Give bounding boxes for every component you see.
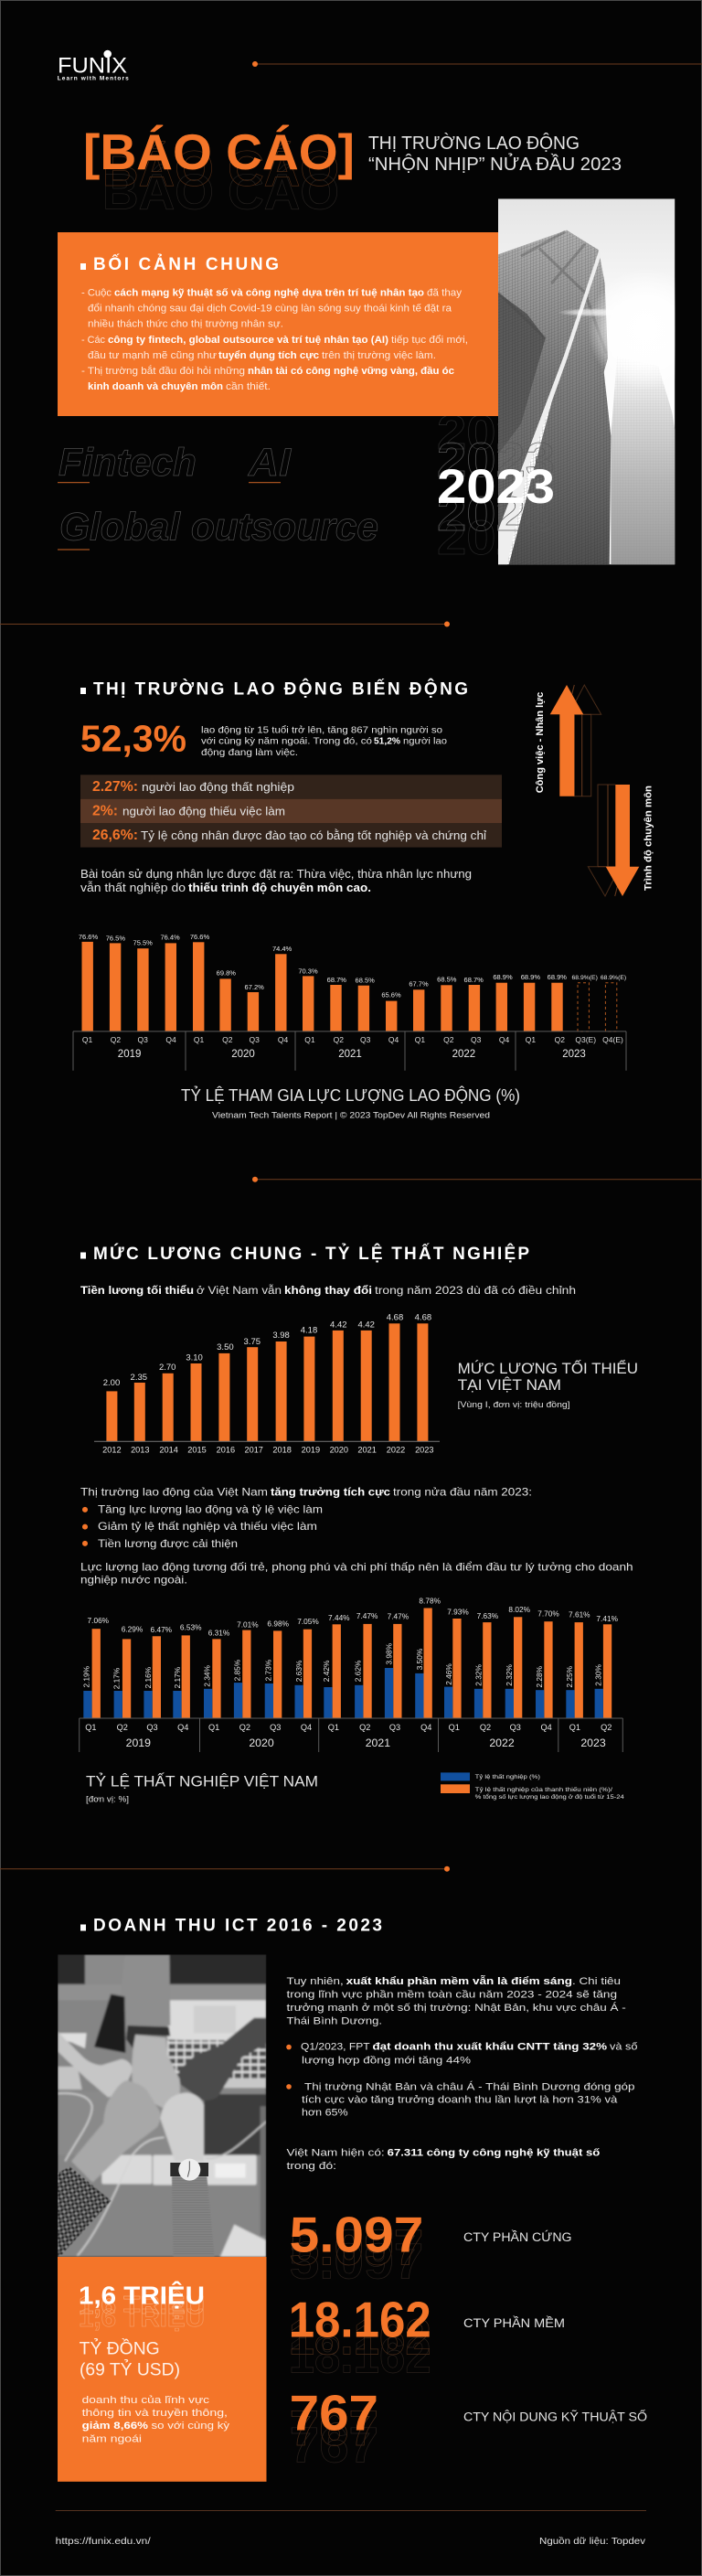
quarter labels: Q1 [328,1723,339,1732]
text block: stat description: động đang làm việc. [201,747,298,758]
value labels: 4.18 [301,1326,317,1336]
stat: 1,6 triệu with ghost outlines: 1,6 TRIỆU [79,2291,205,2319]
text block: minimum wage note: ở Việt Nam vẫn [197,1285,282,1297]
value labels: 76.6% [190,933,209,941]
stat unit: TỶ ĐỒNG [80,2339,160,2359]
panel: labour stats rows: người lao động thất nghiệp [142,780,294,794]
photo: fist bump over desk [58,1954,266,2257]
value labels: 3.10 [186,1353,203,1363]
year labels: 2017 [244,1445,263,1454]
text block: minimum wage note: không thay đổi [284,1286,372,1297]
value labels: 74.4% [272,945,292,953]
blue value labels: 2.17% [173,1666,182,1688]
blue value labels: 2.17% [112,1667,121,1689]
divider with dot: section 3 bottom [0,1866,450,1872]
panel: labour stats rows: 2%: [92,803,118,818]
value labels: 3.50 [217,1342,234,1352]
year labels: 2023 [580,1737,606,1749]
blue value labels: 3.98% [385,1642,394,1664]
orange value labels [88,1597,619,1637]
panel: orange context box [58,232,498,416]
value labels: 68.9%(E) [601,975,626,981]
blue value labels: 2.63% [294,1660,303,1682]
text block: software export: trong lĩnh vực phần mềm toàn cầu năm 2023 - 2024 sẽ tăng [287,1989,617,2000]
bar chart: labour force participation [73,933,626,1071]
chart title: participation: TỶ LỆ THAM GIA LỰC LƯỢNG LAO ĐỘNG (%) [181,1085,520,1105]
panel: labour stats rows: 2.27%: [92,779,138,795]
text block: software export: Thái Bình Dương. [287,2016,382,2027]
blue value labels: 2.46% [444,1663,453,1685]
blue value labels: 2.34% [202,1664,211,1687]
quarter labels: Q4 [301,1723,312,1732]
chart title: minimum wage: MỨC LƯƠNG TỐI THIỂU [458,1359,638,1377]
blue value labels: 2.28% [535,1665,544,1688]
year labels: 2023 [562,1049,586,1060]
year labels: 2023 [415,1445,434,1454]
main 2023 with ghost outlines: 2023 [437,487,555,541]
footer: Nguồn dữ liệu: Topdev [539,2536,646,2547]
divider with dot: section 1 bottom [0,622,450,627]
year labels: 2021 [338,1049,362,1060]
stat: 767 digital content companies: CTY NỘI DUNG KỸ THUẬT SỐ [463,2410,647,2424]
text block: minimum wage note [80,1285,576,1297]
panel: labour stats rows: người lao động thiếu việc làm [122,804,285,818]
value labels: 3.98 [272,1331,290,1341]
text block: context bullets: trên thị trường việc làm. [322,350,436,361]
ghost year behind photo [437,406,555,565]
value labels: 69.8% [217,969,236,978]
year labels: 2022 [387,1445,405,1454]
quarter labels: Q3 [471,1035,482,1044]
year labels: 2016 [217,1445,235,1454]
text block: revenue note: giảm 8,66% [82,2421,148,2432]
blue value labels: 2.73% [263,1659,272,1681]
orange value labels: 7.05% [297,1617,319,1626]
blue bars: unemployment [83,1668,603,1718]
logo: FUNiX: FUNIX [58,53,127,79]
text block: context bullets: kinh doanh và chuyên môn [88,381,223,392]
value labels: 3.75 [244,1337,261,1347]
text block: software export [286,1975,638,2172]
text block: software export: Q1/2023, FPT [301,2042,370,2053]
chart title: unemployment: TỶ LỆ THẤT NGHIỆP VIỆT NAM [86,1772,318,1790]
value labels: 67.7% [409,980,429,988]
orange value labels: 7.41% [596,1614,619,1623]
arrow: up, jobs and workforce [550,685,601,796]
quarter labels: Q2 [480,1723,491,1732]
year labels: 2021 [366,1737,390,1749]
text block: context bullets: cần thiết. [226,381,271,392]
value labels: 67.2% [245,983,264,991]
orange value labels: 6.47% [151,1625,173,1634]
value labels: 65.6% [381,991,401,999]
heading: thị trường lao động biến động: THỊ TRƯỜNG LAO ĐỘNG BIẾN ĐỘNG [93,679,468,699]
text block: revenue note: năm ngoái [82,2434,142,2445]
text block: context bullets: nhân tài có công nghệ vững vàng, đầu óc [248,366,454,377]
quarter labels: Q1 [526,1035,536,1044]
stat: 1,6 triệu with ghost outlines: 1,6 TRIỆU [79,2281,205,2309]
quarter labels: Q1 [449,1723,460,1732]
logo: FUNiX: Learn with Mentors [58,76,129,82]
quarter labels: Q3 [250,1035,260,1044]
footer [56,2511,646,2547]
quarter labels: Q3 [270,1723,281,1732]
heading: bối cảnh chung: BỐI CẢNH CHUNG [93,254,279,274]
ghost year behind photo: 2023 [437,406,555,460]
orange value labels: 7.47% [388,1611,410,1620]
value labels: 4.68 [415,1312,431,1322]
axis and year dividers [73,1031,626,1071]
text block: context bullets [81,288,468,392]
text block: context bullets: đầu tư mạnh mẽ cũng như [88,350,218,361]
value labels [79,933,626,999]
value labels: 68.7% [327,976,346,984]
value labels: 76.5% [106,934,125,942]
orange value labels: 7.61% [569,1609,590,1619]
year labels: 2019 [302,1445,320,1454]
stat unit: (69 TỶ USD) [80,2360,180,2380]
panel: orange revenue card [58,2257,267,2482]
blue value labels: 2.32% [474,1664,484,1686]
year labels [126,1737,606,1749]
value labels [103,1312,431,1388]
stat: 767 digital content companies: 767 [290,2385,378,2442]
text block: context bullets: - Thị trường bắt đầu đòi hỏi những [81,365,245,377]
bar chart: minimum wage [94,1312,440,1454]
blue value labels: 2.30% [593,1664,602,1686]
text block: positive growth list: Tăng lực lượng lao động và tỷ lệ việc làm [98,1502,323,1515]
stat unit [80,2339,180,2380]
label: trình độ chuyên môn: Trình độ chuyên môn [643,786,654,891]
text block: software export: 67.311 công ty công nghệ kỹ thuật số [388,2147,600,2158]
quarter labels: Q4 [420,1723,431,1732]
heading: mức lương chung - tỷ lệ thất nghiệp: MỨC LƯƠNG CHUNG - TỶ LỆ THẤT NGHIỆP [93,1244,529,1264]
orange value labels: 6.29% [122,1624,144,1633]
year labels [102,1445,434,1454]
arrow: down, skill level [588,785,639,896]
text block: software export: . Chi tiêu [572,1976,621,1987]
quarter labels: Q4 [388,1035,399,1044]
stat: 18.162 software companies: 18.162 [289,2308,431,2365]
label: công việc - nhân lực: Công việc - Nhân lực [535,692,546,793]
stat: 5.097 hardware companies: 5.097 [290,2219,423,2276]
legend: unemployment chart: % tổng số lực lượng lao động ở độ tuổi từ 15-24 [475,1792,624,1801]
divider with dot: section 2 bottom [252,1177,702,1182]
stat: 5.097 hardware companies: 5.097 [290,2206,423,2262]
legend: unemployment chart [441,1772,624,1801]
quarter labels: Q2 [334,1035,344,1044]
quarter labels: Q3 [389,1723,400,1732]
value labels: 68.7% [464,976,484,984]
chart title: unemployment: [đơn vị: %] [86,1794,129,1803]
value labels: 2.00 [103,1378,120,1388]
year labels [118,1049,586,1060]
orange value labels: 7.93% [447,1608,469,1617]
quarter labels: Q3 [146,1723,158,1732]
value labels: 68.9%(E) [572,975,598,981]
quarter labels: Q4 [540,1723,552,1732]
orange value labels: 7.06% [88,1616,110,1625]
text block: positive growth list: Lực lượng lao động tương đối trẻ, phong phú và chi phí thấp nên là điểm đầu tư lý tưởng cho doanh [80,1560,633,1573]
title: BÁO CÁO with ghost outlines [83,123,355,220]
outline keyword: Fintech: Fintech [58,441,197,485]
quarter labels: Q4 [278,1035,289,1044]
text block: stat description: người lao [403,735,447,746]
value labels: 70.3% [298,967,318,975]
quarter labels: Q2 [359,1723,370,1732]
text block: stat description: 51,2% [374,735,401,746]
subtitle: “NHỘN NHỊP” NỬA ĐẦU 2023 [368,153,622,175]
text block: context bullets: tiếp tục đổi mới, [391,335,468,346]
stat: 5.097 hardware companies [290,2206,572,2290]
value labels: 2.35 [131,1373,147,1383]
quarter labels: Q1 [82,1035,92,1044]
text block: workforce problem: thiếu trình độ chuyên môn cao. [188,882,371,894]
year labels: 2020 [249,1737,274,1749]
text block: positive growth list: Thị trường lao động của Việt Nam [80,1486,268,1499]
quarter labels [85,1723,612,1732]
text block: software export: và số [610,2042,638,2053]
quarter labels: Q1 [304,1035,315,1044]
blue value labels: 2.62% [353,1660,362,1682]
quarter labels: Q3(E) [575,1035,596,1044]
blue value labels [82,1642,602,1689]
value labels: 68.5% [437,975,457,984]
text block: context bullets: nhiều thách thức cho thị trường nhân sự. [88,319,283,330]
text block: positive growth list: Giảm tỷ lệ thất nghiệp và thiếu việc làm [98,1520,317,1533]
year labels: 2022 [452,1049,475,1060]
stat: 5.097 hardware companies: CTY PHẦN CỨNG [463,2230,572,2244]
main 2023 with ghost outlines [437,433,555,541]
year labels: 2019 [126,1737,151,1749]
text block: context bullets: tuyển dụng tích cực [218,350,319,361]
text block: positive growth list: nghiệp nước ngoài. [80,1574,187,1587]
orange value labels: 8.02% [508,1605,531,1614]
text block: software export: hơn 65% [302,2108,348,2119]
quarter labels: Q2 [555,1035,565,1044]
value labels: 68.9% [521,973,540,981]
blue value labels: 2.32% [505,1664,514,1686]
text block: revenue note: doanh thu của lĩnh vực [82,2395,209,2406]
text block: context bullets: - Cuộc [81,288,112,299]
heading: doanh thu ict: DOANH THU ICT 2016 - 2023 [93,1917,382,1935]
year labels: 2020 [231,1049,255,1060]
blue value labels: 3.50% [415,1648,424,1670]
stat: 18.162 software companies: 18.162 [289,2292,431,2348]
orange bars: youth unemployment [92,1608,612,1718]
quarter labels: Q3 [360,1035,371,1044]
title: BÁO CÁO with ghost outlines: BÁO CÁO [102,140,339,197]
quarter labels: Q4 [165,1035,176,1044]
text block: positive growth list: trong nửa đầu năm 2023: [393,1486,532,1499]
blue value labels: 2.19% [82,1665,91,1688]
value labels: 68.9% [548,973,567,981]
quarter labels: Q2 [443,1035,454,1044]
orange value labels: 7.44% [328,1613,350,1622]
quarter labels: Q4(E) [602,1035,623,1044]
year labels: 2020 [330,1445,348,1454]
text block: software export: Thị trường Nhật Bản và châu Á - Thái Bình Dương đóng góp [304,2081,634,2092]
orange value labels: 7.70% [537,1609,559,1618]
text block: context bullets: - Các [81,335,105,346]
value labels: 68.9% [493,973,513,981]
stat: 1,6 triệu with ghost outlines: 1,6 TRIỆU [79,2303,205,2332]
text block: software export: trong đó: [287,2161,336,2172]
chart title: minimum wage [458,1359,638,1409]
blue value labels: 2.25% [565,1665,574,1688]
quarter labels: Q1 [194,1035,204,1044]
main 2023 with ghost outlines: 2023 [437,460,555,514]
main 2023 with ghost outlines: 2023 [437,433,555,487]
value labels: 4.42 [330,1320,347,1330]
stat: 18.162 software companies [289,2292,565,2383]
title: BÁO CÁO with ghost outlines: BÁO CÁO [102,164,339,220]
value labels: 68.5% [356,976,375,984]
stat: 5.097 hardware companies: 5.097 [290,2233,423,2290]
text block: minimum wage note: trong năm 2023 dù đã có điều chỉnh [375,1286,576,1297]
text block: minimum wage note: Tiền lương tối thiểu [80,1286,194,1297]
year labels: 2012 [102,1445,122,1454]
text block: positive growth list [80,1486,633,1587]
ghost year behind photo: 2023 [437,511,555,565]
text block: context bullets: đổi nhanh chóng sau đại dịch Covid-19 cùng làn sóng suy thoái kinh tế đặt ra [88,304,452,315]
quarter labels: Q3 [138,1035,148,1044]
panel: labour stats rows [80,775,502,848]
bars [82,942,563,1031]
text block: software export: Việt Nam hiện có: [287,2147,385,2158]
quarter labels: Q2 [601,1723,612,1732]
text block: software export: tích cực vào tăng trưởng doanh thu lần lượt là hơn 31% và [302,2095,618,2106]
photo: skyscraper [498,198,675,565]
outline keyword: AI: AI [248,441,292,485]
text block: positive growth list: tăng trưởng tích cực [271,1486,390,1499]
bar chart: unemployment rate [80,1597,622,1752]
quarter labels: Q1 [415,1035,425,1044]
subtitle [368,133,622,175]
chart title: minimum wage: TẠI VIỆT NAM [458,1376,561,1394]
year labels: 2021 [357,1445,377,1454]
text block: software export: xuất khẩu phần mềm vẫn là điểm sáng [346,1975,572,1987]
blue value labels: 2.42% [322,1660,331,1682]
blue value labels: 2.16% [144,1666,153,1688]
stat: 767 digital content companies: 767 [290,2400,378,2456]
chart title: minimum wage: [Vùng I, đơn vị: triệu đồng] [458,1400,570,1409]
text block: workforce problem: Bài toán sử dụng nhân lực được đặt ra: Thừa việc, thừa nhân lực nhưng [80,868,472,881]
orange value labels: 8.78% [419,1597,441,1606]
text block: software export: trưởng mạnh ở một số thị trường: Nhật Bản, khu vực châu Á - [287,2002,626,2014]
quarter labels: Q4 [499,1035,509,1044]
text block: context bullets: đã thay [427,288,463,299]
quarter labels: Q2 [239,1723,250,1732]
stat: 18.162 software companies: 18.162 [289,2326,431,2383]
value labels: 75.5% [133,939,153,947]
quarter labels: Q3 [510,1723,521,1732]
value labels: 76.6% [79,933,98,941]
value labels: 4.42 [357,1320,375,1330]
legend: unemployment chart: Tỷ lệ thất nghiệp (%) [475,1772,540,1780]
year labels: 2015 [187,1445,207,1454]
text block: revenue note: so với cùng kỳ [152,2421,229,2432]
stat: 52,3%: 52,3% [80,718,186,760]
orange value labels: 6.31% [208,1628,230,1637]
text block: stat description: với cùng kỳ năm ngoái. Trong đó, có [201,735,372,746]
orange value labels: 6.98% [267,1619,290,1628]
outline keyword: Global outsource: Global outsource [59,506,378,550]
panel: labour stats rows: Tỷ lệ công nhân được đào tạo có bằng tốt nghiệp và chứng chỉ [141,828,486,842]
stat: 18.162 software companies: CTY PHẦN MỀM [463,2316,565,2330]
stat: 767 digital content companies [290,2385,647,2474]
axis and year dividers [80,1718,622,1752]
text block: workforce problem [80,868,472,894]
year labels: 2013 [131,1445,150,1454]
text block: context bullets: công ty fintech, global outsource và trí tuệ nhân tạo (AI) [108,335,388,346]
value labels: 2.70 [159,1363,176,1373]
orange value labels: 7.01% [237,1619,259,1629]
title: BÁO CÁO with ghost outlines: [BÁO CÁO] [83,123,355,180]
year labels: 2022 [489,1737,515,1749]
text block: software export: đạt doanh thu xuất khẩu CNTT tăng 32% [373,2042,607,2053]
year labels: 2019 [118,1049,141,1060]
subtitle: THỊ TRƯỜNG LAO ĐỘNG [368,133,580,154]
quarter labels: Q1 [569,1723,580,1732]
year labels: 2014 [159,1445,178,1454]
value labels: 4.68 [387,1312,403,1322]
quarter labels: Q1 [85,1723,97,1732]
text block: context bullets: cách mạng kỹ thuật số và công nghệ dựa trên trí tuệ nhân tạo [114,288,424,299]
source note: Vietnam Tech Talents Report | © 2023 TopDev All Rights Reserved [212,1110,490,1119]
text block: stat description [201,724,447,758]
blue value labels: 2.85% [233,1659,242,1681]
text block: revenue note [82,2395,229,2445]
quarter labels: Q2 [117,1723,128,1732]
footer: https://funix.edu.vn/ [56,2536,151,2547]
quarter labels [82,1035,623,1044]
text block: software export: Tuy nhiên, [287,1976,344,1987]
divider with dot: top [252,61,702,67]
text block: software export: lượng hợp đồng mới tăng 44% [302,2055,471,2066]
text block: workforce problem: vẫn thất nghiệp do [80,881,186,894]
orange value labels: 6.53% [180,1623,202,1632]
year labels: 2018 [272,1445,292,1454]
text block: revenue note: thông tin và truyền thông, [82,2408,228,2419]
quarter labels: Q1 [208,1723,219,1732]
panel: labour stats rows: 26,6%: [92,828,138,843]
chart title: unemployment [86,1772,318,1803]
orange value labels: 7.47% [356,1611,378,1620]
value labels: 76.4% [160,934,180,942]
stat: 1,6 triệu with ghost outlines [79,2281,205,2332]
bars [106,1323,428,1441]
text block: stat description: lao động từ 15 tuổi trở lên, tăng 867 nghìn người so [201,724,442,735]
quarter labels: Q2 [111,1035,121,1044]
orange value labels: 7.63% [477,1611,499,1620]
stat: 767 digital content companies: 767 [290,2417,378,2474]
quarter labels: Q2 [222,1035,233,1044]
text block: positive growth list: Tiền lương được cải thiện [98,1537,238,1550]
legend: unemployment chart: Tỷ lệ thất nghiệp của thanh thiếu niên (%)/ [475,1785,612,1793]
quarter labels: Q4 [177,1723,188,1732]
